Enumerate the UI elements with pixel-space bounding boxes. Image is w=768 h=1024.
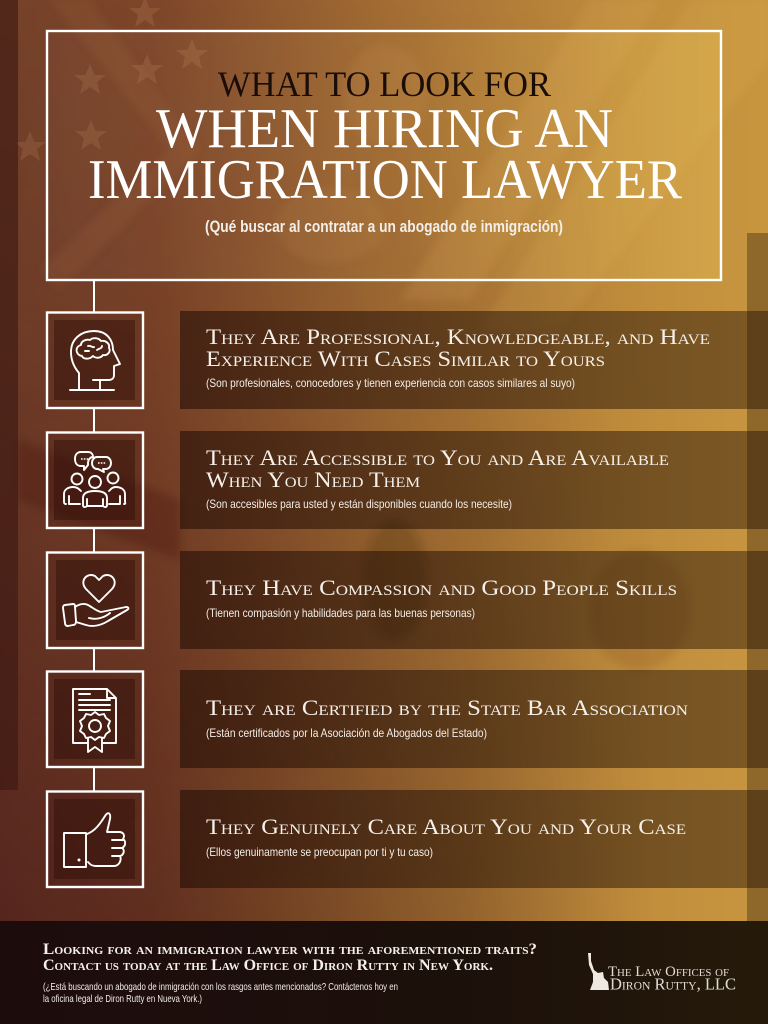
logo [588,953,736,994]
panel: item 1 [180,311,768,409]
logo text: The Law Offices of [608,964,729,980]
panel: item 4 [180,670,768,768]
icon: hand holding heart [47,552,143,648]
panel: footer [0,921,768,1024]
title line 3: IMMIGRATION LAWYER [88,149,683,211]
icon: group talking [47,432,143,528]
panel: item 3 [180,551,768,649]
item 4 Spanish: (Están certificados por la Asociación de Abogados del Estado) [206,726,487,740]
item 2 Spanish: (Son accesibles para usted y están disponibles cuando los necesite) [206,497,512,511]
item 2 heading [206,445,669,492]
icon: head with brain [47,312,143,408]
item 1 heading: They Are Professional, Knowledgeable, and Have [206,324,710,349]
icon: statue of liberty [588,953,609,990]
item 5 Spanish: (Ellos genuinamente se preocupan por ti y tu caso) [206,845,433,859]
title line 1: WHAT TO LOOK FOR [218,64,551,104]
subtitle Spanish: (Qué buscar al contratar a un abogado de inmigración) [205,218,563,236]
logo text [608,964,736,994]
footer Spanish text: (¿Está buscando un abogado de inmigración con los rasgos antes mencionados? Contáctenos hoy en [43,981,398,993]
icon: certificate [47,672,143,767]
item 1 heading [206,324,710,371]
logo text: Diron Rutty, LLC [610,974,736,994]
item 1 heading: Experience With Cases Similar to Yours [206,346,605,371]
panel: item 2 [180,431,768,529]
item 2 heading: They Are Accessible to You and Are Available [206,445,669,470]
title line 2: WHEN HIRING AN [156,98,613,160]
item 5 heading: They Genuinely Care About You and Your Case [206,814,686,839]
item 3 heading: They Have Compassion and Good People Skills [206,575,677,600]
icon: thumbs up [47,792,143,887]
item 3 Spanish: (Tienen compasión y habilidades para las buenas personas) [206,606,475,620]
footer call to action [43,941,537,974]
footer call to action: Looking for an immigration lawyer with the aforementioned traits? [43,941,537,958]
item 2 heading: When You Need Them [206,467,420,492]
footer Spanish text: la oficina legal de Diron Rutty en Nueva York.) [43,993,202,1005]
item 4 heading: They are Certified by the State Bar Association [206,695,688,720]
footer Spanish text [43,981,398,1005]
panel: item 5 [180,790,768,888]
connector line [93,281,95,791]
title panel [47,31,721,280]
item 1 Spanish: (Son profesionales, conocedores y tienen experiencia con casos similares al suyo) [206,376,575,390]
footer call to action: Contact us today at the Law Office of Diron Rutty in New York. [43,957,493,974]
